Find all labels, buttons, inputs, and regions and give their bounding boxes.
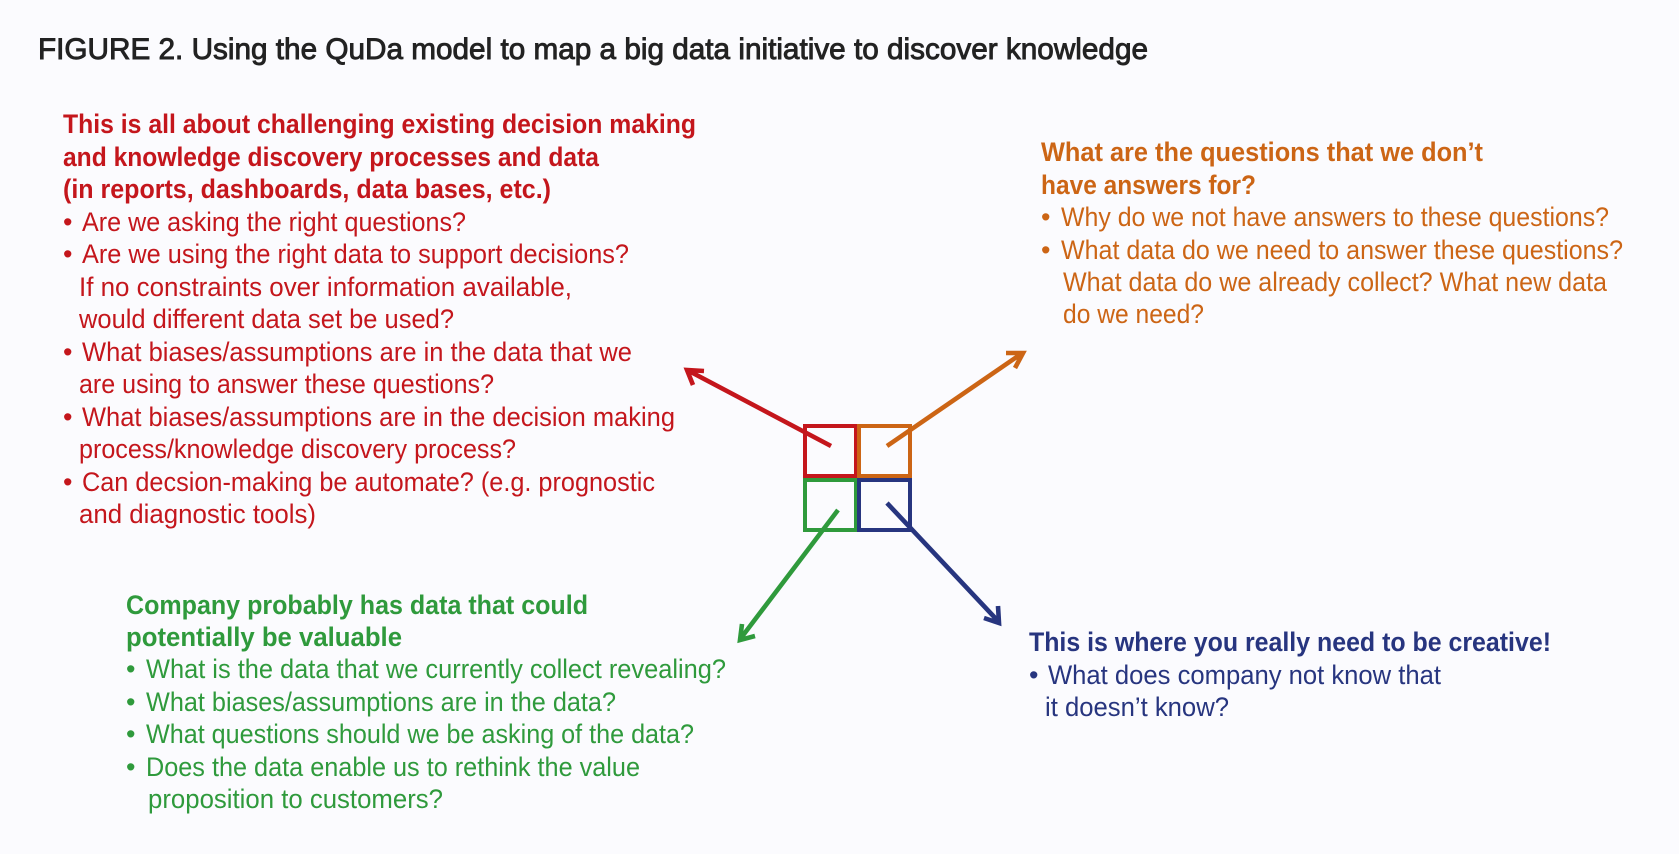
bullet list: red questions: • [63, 239, 72, 269]
bullet list: green questions: What biases/assumptions are in the data? [146, 687, 616, 717]
panel: red quadrant text [63, 109, 696, 529]
bullet list: red questions: • [63, 207, 72, 237]
bullet list: navy question: • [1029, 660, 1038, 690]
panel: orange quadrant text [1041, 137, 1623, 329]
bullet list: orange questions: What data do we already collect? What new data [1063, 267, 1608, 297]
bullet list: green questions [126, 654, 726, 814]
bullet list: red questions: What biases/assumptions are in the decision making [82, 402, 675, 432]
square: green quadrant [805, 480, 856, 530]
bullet list: red questions: Can decsion-making be automate? (e.g. prognostic [82, 467, 655, 497]
bullet list: orange questions: • [1041, 235, 1050, 265]
arrow: red, up-left [687, 370, 831, 446]
panel: navy quadrant text [1029, 627, 1551, 722]
QuDa model diagram [687, 353, 1023, 640]
bullet list: red questions: Are we using the right data to support decisions? [82, 239, 629, 269]
heading: questions without answers: have answers for? [1041, 170, 1256, 200]
heading: questions without answers [1041, 137, 1483, 200]
arrow: green, down-left [740, 510, 838, 640]
heading: company data could be valuable: Company probably has data that could [126, 590, 588, 620]
bullet list: navy question: it doesn’t know? [1045, 692, 1229, 722]
bullet list: red questions [63, 207, 675, 529]
square: red quadrant [805, 426, 856, 476]
bullet list: green questions: proposition to customers? [148, 784, 443, 814]
heading: be creative: This is where you really need to be creative! [1029, 627, 1551, 657]
bullet list: green questions: • [126, 719, 135, 749]
bullet list: green questions: Does the data enable us to rethink the value [146, 752, 640, 782]
bullet list: red questions: • [63, 337, 72, 367]
bullet list: red questions: If no constraints over information available, [79, 272, 572, 302]
bullet list: red questions: are using to answer these questions? [79, 369, 494, 399]
heading: challenging existing decision making: (in reports, dashboards, data bases, etc.) [63, 174, 551, 204]
bullet list: navy question: What does company not know that [1048, 660, 1441, 690]
bullet list: red questions: would different data set be used? [78, 304, 454, 334]
bullet list: orange questions: • [1041, 202, 1050, 232]
heading: company data could be valuable [126, 590, 588, 652]
square: orange quadrant [859, 426, 910, 476]
bullet list: green questions: • [126, 654, 135, 684]
bullet list: navy question [1029, 660, 1441, 722]
bullet list: orange questions: What data do we need to answer these questions? [1061, 235, 1623, 265]
bullet list: orange questions [1041, 202, 1623, 329]
bullet list: red questions: Are we asking the right questions? [82, 207, 466, 237]
bullet list: red questions: • [63, 467, 72, 497]
panel: green quadrant text [126, 590, 726, 814]
heading: challenging existing decision making: This is all about challenging existing decision making [63, 109, 696, 139]
bullet list: red questions: What biases/assumptions are in the data that we [82, 337, 632, 367]
bullet list: red questions: and diagnostic tools) [79, 499, 316, 529]
heading: challenging existing decision making [63, 109, 696, 204]
heading: questions without answers: What are the questions that we don’t [1041, 137, 1483, 167]
title: FIGURE 2. Using the QuDa model to map a big data initiative to discover knowledge [38, 33, 1148, 66]
bullet list: orange questions: Why do we not have answers to these questions? [1061, 202, 1609, 232]
bullet list: green questions: What is the data that we currently collect revealing? [146, 654, 726, 684]
bullet list: green questions: What questions should we be asking of the data? [146, 719, 694, 749]
bullet list: orange questions: do we need? [1063, 299, 1204, 329]
bullet list: green questions: • [126, 687, 135, 717]
heading: challenging existing decision making: and knowledge discovery processes and data [63, 142, 600, 172]
bullet list: red questions: process/knowledge discovery process? [79, 434, 516, 464]
arrow: navy, down-right [887, 503, 999, 623]
heading: company data could be valuable: potentially be valuable [126, 622, 402, 652]
arrow: orange, up-right [887, 353, 1023, 446]
bullet list: green questions: • [126, 752, 135, 782]
square: navy quadrant [859, 480, 910, 530]
bullet list: red questions: • [63, 402, 72, 432]
